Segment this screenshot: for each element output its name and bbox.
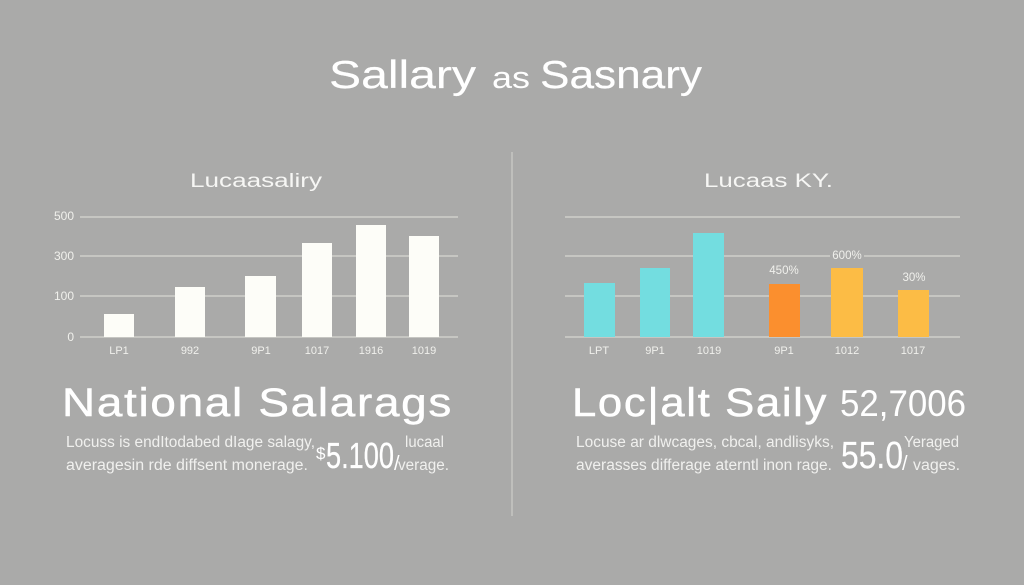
- orange bar: [769, 284, 800, 337]
- x axis labels: 1017: [901, 345, 925, 357]
- text block: national description: 5.100: [326, 435, 394, 476]
- x axis labels: 992: [181, 345, 199, 357]
- text block: national description: $: [316, 444, 326, 463]
- percent labels: 450%: [769, 265, 799, 277]
- text block: national description: lucaal: [405, 434, 444, 451]
- title: Sallary: [329, 54, 477, 97]
- x axis labels: 9P1: [645, 345, 665, 357]
- x axis labels: 1916: [359, 345, 383, 357]
- teal bars: [584, 233, 724, 337]
- x axis labels: [589, 345, 925, 357]
- bars: [104, 225, 439, 337]
- y axis labels: [54, 209, 74, 344]
- yellow bars: [831, 268, 929, 337]
- x axis labels: LPT: [589, 345, 609, 357]
- heading: local: Loc|alt Saily: [572, 381, 828, 425]
- text block: national description: Locuss is endItodabed dIage salagy,: [66, 434, 315, 451]
- y axis labels: 0: [67, 330, 74, 344]
- text block: national description: verage.: [398, 457, 449, 474]
- y axis labels: 100: [54, 289, 74, 303]
- text block: local description: Locuse ar dlwcages, cbcal, andlisyks,: [576, 434, 834, 451]
- chart title: right: Lucaas KY.: [704, 171, 833, 192]
- heading: national: National Salarags: [62, 381, 453, 425]
- text block: national description: [66, 434, 449, 476]
- title: Sasnary: [540, 54, 703, 97]
- x axis labels: LP1: [109, 345, 129, 357]
- text block: local description: Yeraged: [904, 434, 959, 451]
- title: [329, 54, 703, 97]
- text block: local description: [576, 434, 960, 477]
- chart title: left: Lucaasaliry: [190, 171, 323, 192]
- panel: local salary: [565, 171, 966, 477]
- x axis labels: 1017: [305, 345, 329, 357]
- text block: local description: vages.: [913, 457, 960, 474]
- x axis labels: 1012: [835, 345, 859, 357]
- text block: local description: averasses differage aterntl inon rage.: [576, 457, 832, 474]
- title: as: [492, 60, 530, 95]
- x axis labels: 1019: [697, 345, 721, 357]
- percent labels: [769, 248, 926, 284]
- text block: national description: /: [394, 453, 400, 475]
- panel: national salary: [54, 171, 458, 476]
- text block: local description: 55.0: [841, 435, 903, 477]
- bar chart: right: [565, 217, 960, 357]
- text block: national description: averagesin rde diffsent monerage.: [66, 457, 308, 474]
- y axis labels: 300: [54, 249, 74, 263]
- x axis labels: 9P1: [251, 345, 271, 357]
- bar chart: left: [54, 209, 458, 357]
- x axis labels: 9P1: [774, 345, 794, 357]
- center divider: [511, 152, 513, 516]
- x axis labels: [109, 345, 436, 357]
- x axis labels: 1019: [412, 345, 436, 357]
- percent labels: 600%: [832, 250, 862, 262]
- y axis labels: 500: [54, 209, 74, 223]
- text block: local description: /: [902, 453, 908, 475]
- percent labels: 30%: [902, 272, 926, 284]
- figure: local value: 52,7006: [840, 383, 966, 424]
